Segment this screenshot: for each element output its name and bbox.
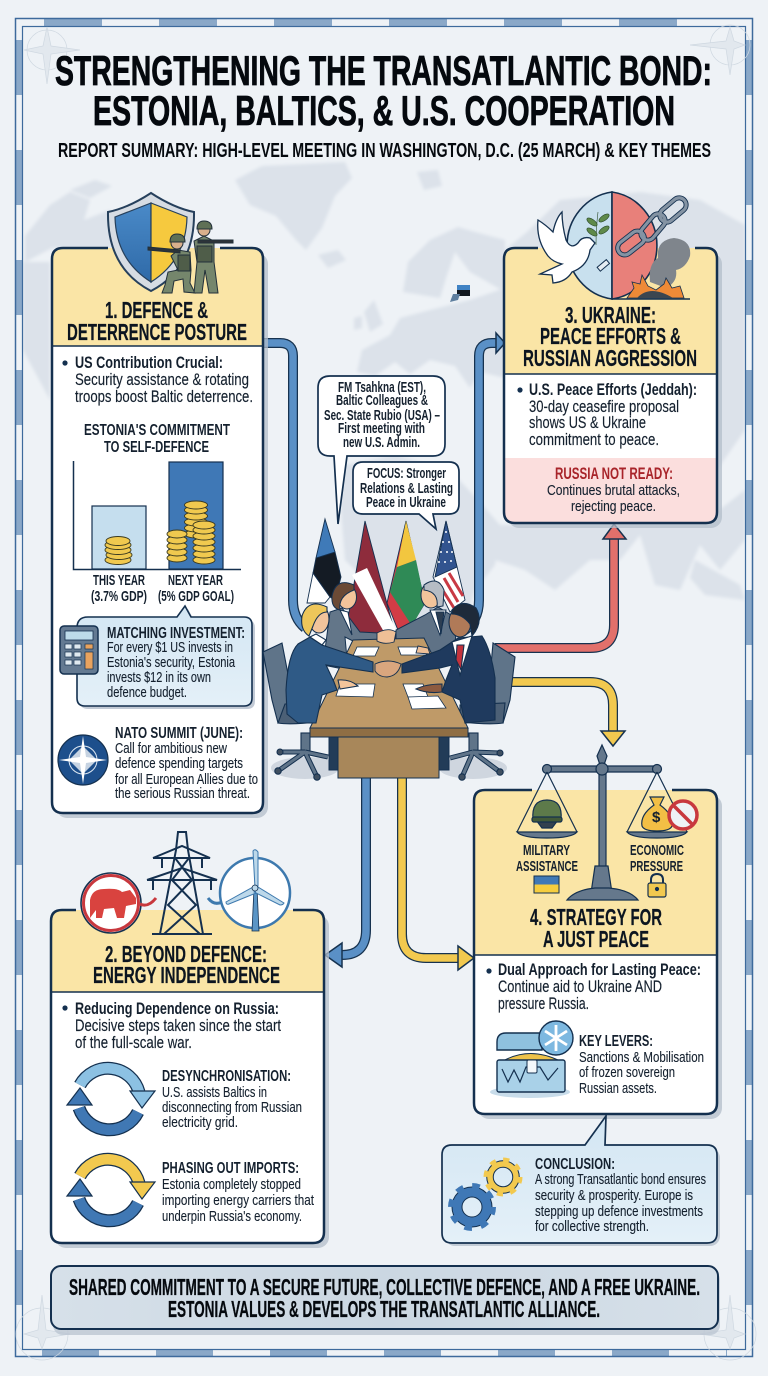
flag: Latvia bbox=[348, 521, 397, 640]
text: dual approach: pressure Russia. bbox=[498, 994, 589, 1013]
chair: left bbox=[263, 643, 328, 780]
money bag bbox=[642, 797, 672, 831]
speech bubble: attendees: Sec. State Rubio (USA) – bbox=[324, 407, 440, 424]
flags bbox=[307, 519, 465, 640]
text: phasing out imports: importing energy carriers that bbox=[162, 1192, 315, 1209]
flag: Estonia bbox=[307, 519, 341, 603]
text: US contribution: troops boost Baltic deterrence. bbox=[75, 387, 253, 406]
speech bubble: attendees: FM Tsahkna (EST), bbox=[338, 379, 426, 396]
speech bubble: focus: Relations & Lasting bbox=[360, 480, 453, 497]
icon: NATO star bbox=[58, 735, 108, 785]
arrow: meeting to panel 3 red bbox=[495, 524, 626, 648]
text: US contribution: US Contribution Crucial: bbox=[75, 353, 223, 372]
soldier standing bbox=[194, 221, 233, 293]
text: US peace efforts: 30-day ceasefire proposal bbox=[529, 397, 679, 416]
compass rose top left bbox=[24, 27, 80, 84]
icon: balance scale bbox=[517, 745, 697, 900]
heading bbox=[523, 302, 697, 371]
heading bbox=[67, 297, 247, 345]
icon: padlock bbox=[648, 874, 666, 897]
speech bubble: attendees: new U.S. Admin. bbox=[343, 434, 420, 451]
text: reducing dependence: Reducing Dependence on Russia: bbox=[75, 999, 279, 1018]
icon: peace and conflict bbox=[538, 192, 690, 299]
heading: PEACE EFFORTS & bbox=[540, 323, 681, 349]
heading bbox=[93, 941, 280, 988]
NATO summit block: defence spending targets bbox=[115, 755, 243, 772]
speech bubble: focus: FOCUS: Stronger bbox=[367, 465, 446, 482]
arrow: panel 1 to meeting bbox=[263, 343, 305, 628]
icon: phasing out cycle arrows bbox=[67, 1159, 155, 1221]
fire bbox=[627, 275, 684, 298]
chart labels bbox=[91, 572, 234, 605]
compass rose bottom left bbox=[16, 1295, 70, 1360]
heading: 2. BEYOND DEFENCE: bbox=[105, 941, 267, 967]
text: dual approach: Continue aid to Ukraine AND bbox=[498, 977, 662, 996]
text: key levers: KEY LEVERS: bbox=[579, 1033, 653, 1050]
text: reducing dependence bbox=[62, 999, 281, 1052]
panel: 4 strategy for a just peace bbox=[474, 745, 722, 1119]
meeting scene bbox=[263, 581, 515, 780]
heading: DETERRENCE POSTURE bbox=[67, 319, 247, 345]
scale labels bbox=[516, 842, 684, 875]
text: phasing out imports: underpin Russia's economy. bbox=[162, 1208, 302, 1225]
text: US contribution: Security assistance & rotating bbox=[75, 370, 249, 389]
chair shadows bbox=[271, 757, 507, 779]
text: dual approach: Dual Approach for Lasting Peace: bbox=[498, 960, 701, 979]
icon: gears bbox=[451, 1160, 520, 1228]
flag: Lithuania bbox=[387, 521, 425, 640]
text: desynchronisation: DESYNCHRONISATION: bbox=[162, 1068, 291, 1085]
arrow: meeting to panel 4 yellow bbox=[505, 682, 625, 746]
arrow: meeting to panel 2 bbox=[325, 775, 366, 967]
callout: matching investment: For every $1 US invests in bbox=[107, 639, 233, 656]
text: key levers: of frozen sovereign bbox=[579, 1064, 675, 1081]
callout: matching investment: Estonia's security, Estonia bbox=[107, 654, 235, 671]
text: US peace efforts bbox=[517, 380, 697, 449]
callout: conclusion: CONCLUSION: bbox=[535, 1156, 615, 1173]
callout: conclusion: for collective strength. bbox=[535, 1218, 649, 1235]
icon: desynchronisation cycle arrows bbox=[67, 1068, 155, 1130]
dove bbox=[538, 212, 595, 283]
text: phasing out imports: Estonia completely stopped bbox=[162, 1176, 301, 1193]
chart heading: ESTONIA'S COMMITMENT bbox=[84, 422, 230, 439]
person: back right bbox=[396, 581, 456, 665]
person: front left bbox=[286, 604, 373, 723]
NATO summit block: the serious Russian threat. bbox=[115, 785, 250, 802]
scale labels: ASSISTANCE bbox=[516, 858, 578, 875]
chart labels: NEXT YEAR bbox=[168, 572, 223, 589]
speech bubble: focus: Peace in Ukraine bbox=[366, 494, 446, 511]
text: key levers bbox=[579, 1033, 704, 1097]
callout: matching investment bbox=[60, 606, 255, 709]
speech bubble: attendees: First meeting with bbox=[338, 420, 425, 437]
text: dual approach bbox=[486, 960, 701, 1013]
documents bbox=[336, 647, 446, 709]
arrow: meeting to panel 4 bbox=[402, 775, 474, 970]
text: Russia not ready: Continues brutal attacks, bbox=[547, 482, 680, 499]
callout: matching investment: defence budget. bbox=[107, 684, 187, 701]
heading: ENERGY INDEPENDENCE bbox=[93, 962, 280, 988]
smoke bbox=[650, 238, 690, 288]
heading bbox=[530, 904, 662, 952]
text: US peace efforts: commitment to peace. bbox=[529, 430, 659, 449]
NATO summit block bbox=[58, 725, 258, 802]
icon: large coin stacks bbox=[167, 501, 215, 564]
NATO summit block: Call for ambitious new bbox=[115, 740, 227, 757]
soldier kneeling bbox=[148, 234, 195, 293]
text: reducing dependence: of the full-scale war. bbox=[75, 1033, 192, 1052]
compass rose top right bbox=[690, 25, 750, 75]
no entry sign bbox=[669, 801, 697, 829]
text: US contribution bbox=[62, 353, 253, 406]
heading: 3. UKRAINE: bbox=[565, 302, 656, 328]
handshake: front bbox=[375, 661, 401, 677]
icon: frozen treasure chest bbox=[490, 1021, 573, 1098]
text: reducing dependence: Decisive steps taken since the start bbox=[75, 1016, 281, 1035]
world map background bbox=[23, 162, 745, 640]
NATO summit block: for all European Allies due to bbox=[115, 771, 258, 788]
icon: shield and soldiers bbox=[108, 193, 233, 293]
icon: calculator bbox=[60, 626, 98, 674]
speech bubble: focus bbox=[353, 462, 459, 529]
speech bubble: attendees: Baltic Colleagues & bbox=[336, 392, 428, 409]
icon: bear in circle bbox=[81, 873, 156, 933]
text: US peace efforts: shows US & Ukraine bbox=[529, 413, 646, 432]
callout: conclusion: stepping up defence investments bbox=[535, 1203, 703, 1220]
panel: 4 strategy for a just peace: $ bbox=[652, 809, 661, 826]
text: desynchronisation: electricity grid. bbox=[162, 1114, 238, 1131]
text: key levers: Russian assets. bbox=[579, 1080, 657, 1097]
heading: 1. DEFENCE & bbox=[105, 297, 208, 323]
helmet bbox=[533, 800, 561, 820]
text: desynchronisation: U.S. assists Baltics in bbox=[162, 1084, 267, 1101]
table bbox=[310, 638, 468, 778]
chart heading: TO SELF-DEFENCE bbox=[104, 439, 209, 456]
icon: Ukraine flag bbox=[534, 876, 559, 893]
callout: conclusion: A strong Transatlantic bond ensures bbox=[535, 1171, 706, 1188]
text: Russia not ready: RUSSIA NOT READY: bbox=[555, 464, 673, 483]
speech bubble: attendees bbox=[318, 376, 445, 524]
footer banner bbox=[51, 1266, 720, 1335]
map marker: Estonia bbox=[450, 285, 470, 302]
scale labels: ECONOMIC bbox=[630, 842, 684, 859]
scale labels: MILITARY bbox=[523, 842, 570, 859]
compass rose bottom right bbox=[700, 1295, 756, 1360]
person: front right bbox=[402, 603, 495, 723]
chart labels: THIS YEAR bbox=[93, 572, 145, 589]
icon: wind turbine in circle bbox=[208, 850, 290, 931]
callout: matching investment: invests $12 in its own bbox=[107, 669, 211, 686]
flag: United States bbox=[433, 521, 465, 612]
text: US peace efforts: U.S. Peace Efforts (Jeddah): bbox=[529, 380, 697, 399]
arrow: meeting to panel 3 bbox=[462, 333, 505, 632]
text: phasing out imports bbox=[162, 1160, 315, 1225]
chart labels: (5% GDP GOAL) bbox=[158, 588, 234, 605]
text: key levers: Sanctions & Mobilisation bbox=[579, 1049, 704, 1066]
chair: right bbox=[450, 643, 515, 780]
text: Russia not ready bbox=[547, 464, 680, 515]
scale labels: PRESSURE bbox=[630, 858, 683, 875]
callout: conclusion bbox=[442, 1116, 720, 1246]
chart heading bbox=[84, 422, 230, 456]
chart labels: (3.7% GDP) bbox=[91, 588, 147, 605]
title bbox=[55, 47, 712, 134]
bar chart bbox=[74, 461, 241, 605]
text: phasing out imports: PHASING OUT IMPORTS: bbox=[162, 1160, 299, 1177]
text: desynchronisation bbox=[162, 1068, 302, 1131]
NATO summit block: NATO SUMMIT (JUNE): bbox=[115, 725, 243, 742]
text: Russia not ready: rejecting peace. bbox=[571, 498, 656, 515]
text: desynchronisation: disconnecting from Russian bbox=[162, 1099, 302, 1116]
olive branch bbox=[586, 212, 610, 245]
heading: A JUST PEACE bbox=[543, 926, 649, 952]
panel: 3 Ukraine bbox=[504, 192, 722, 528]
callout: conclusion: security & prosperity. Europe is bbox=[535, 1187, 693, 1204]
heading: 4. STRATEGY FOR bbox=[530, 904, 662, 930]
broken chain bbox=[615, 195, 689, 258]
callout: matching investment: MATCHING INVESTMENT: bbox=[107, 625, 245, 642]
person: back left bbox=[323, 583, 379, 670]
panel: 1 defence and deterrence posture bbox=[52, 193, 268, 818]
icon: small coin stack bbox=[105, 536, 132, 564]
panel: 2 energy independence bbox=[51, 832, 329, 1248]
icon: power pylon bbox=[147, 832, 217, 934]
handshake: back bbox=[377, 630, 430, 654]
